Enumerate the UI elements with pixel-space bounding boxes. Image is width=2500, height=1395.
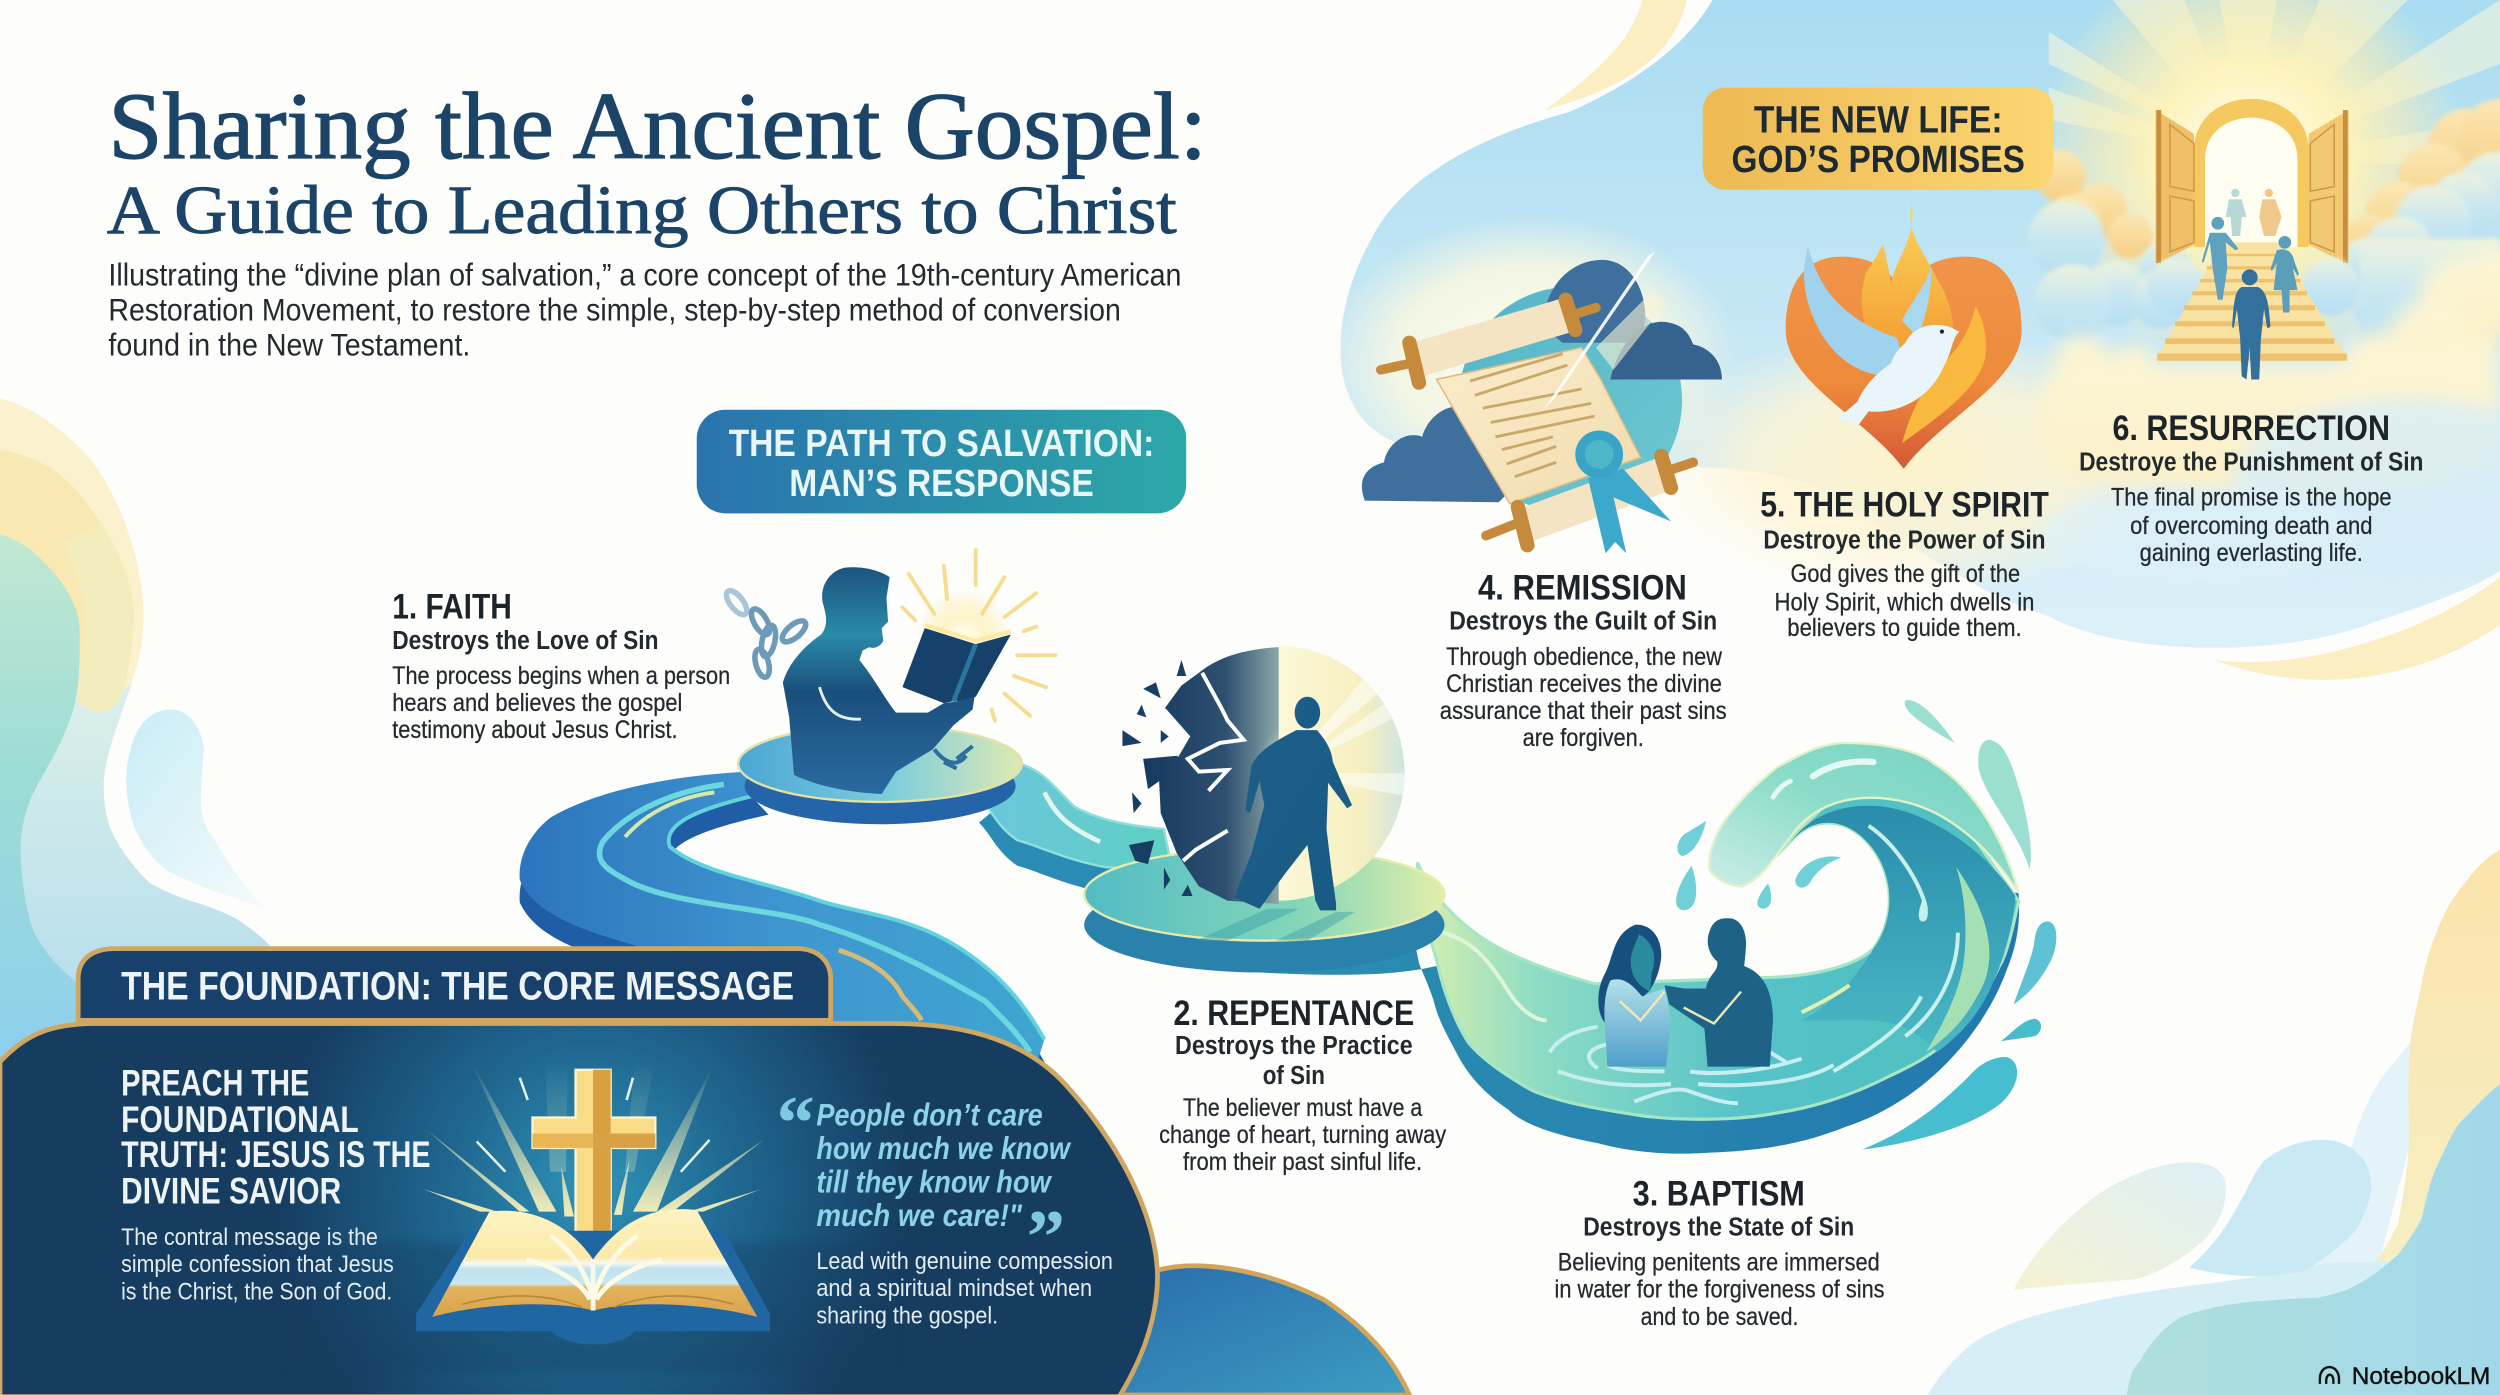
- foundation heading text: DIVINE SAVIOR: [121, 1171, 341, 1212]
- step 6 text: resurrection: of overcoming death and: [2130, 513, 2372, 540]
- cream clouds and ground: [2037, 246, 2500, 497]
- woman hair: [1598, 925, 1661, 1028]
- light beam: [1543, 252, 1655, 410]
- golden clouds: [2034, 99, 2500, 258]
- illustration: faith, person reading a glowing book: [723, 550, 1055, 794]
- step 6 text: resurrection: The final promise is the hope: [2111, 484, 2392, 511]
- title: [107, 73, 1207, 248]
- step 5 text: holy spirit: 5. THE HOLY SPIRIT: [1760, 486, 2049, 525]
- woman torso: [1604, 979, 1671, 1067]
- step 4 text: remission: Through obedience, the new: [1446, 644, 1722, 671]
- parchment: [1437, 348, 1641, 504]
- heading pill: the new life: [1703, 88, 2054, 190]
- icon: golden cross: [533, 1070, 655, 1267]
- pale green stripe: [1926, 867, 1989, 1052]
- step 1 text: faith: Destroys the Love of Sin: [392, 625, 658, 655]
- dark inner curl: [1789, 806, 2015, 1052]
- step 4 text: remission: assurance that their past sins: [1440, 698, 1727, 725]
- dark outer band: [1260, 893, 2019, 1154]
- step 1 text: faith: The process begins when a person: [392, 663, 730, 690]
- background blobs: left: [0, 399, 271, 1065]
- step 6 text: resurrection: [2079, 409, 2423, 567]
- broken chain: [723, 587, 809, 679]
- book light rays: [902, 550, 1055, 721]
- wave crest: [1709, 743, 2018, 893]
- step 5 text: holy spirit: believers to guide them.: [1787, 615, 2022, 642]
- step 3 text: baptism: [1555, 1174, 1885, 1331]
- foundation heading text: [121, 1062, 430, 1212]
- dove: [1804, 246, 1960, 424]
- right door: [2307, 110, 2349, 265]
- foundation heading text: PREACH THE: [121, 1062, 309, 1103]
- step 2 text: repentance: [1159, 994, 1447, 1176]
- blue clouds: [2028, 151, 2500, 351]
- step 4 text: remission: Christian receives the divine: [1446, 671, 1722, 698]
- step 2 text: repentance: change of heart, turning away: [1159, 1122, 1447, 1149]
- heading pill: the new life: GOD’S PROMISES: [1732, 138, 2025, 181]
- step 3 text: baptism: Believing penitents are immersed: [1558, 1250, 1880, 1277]
- illustration: gate, stairs and clouds: [2028, 0, 2500, 582]
- quote: People don’t care: [816, 1097, 1043, 1133]
- icon: open book: [416, 1209, 770, 1344]
- lit half of sphere: [1277, 646, 1405, 901]
- step 2 text: repentance: The believer must have a: [1183, 1095, 1422, 1122]
- quote: much we care!": [816, 1197, 1023, 1233]
- watermark: NotebookLM: NotebookLM: [2352, 1363, 2490, 1390]
- step 4 text: remission: are forgiven.: [1523, 725, 1644, 752]
- top roller: [1409, 314, 1570, 362]
- step 5 text: holy spirit: [1760, 486, 2049, 642]
- step 6 text: resurrection: 6. RESURRECTION: [2113, 409, 2390, 448]
- arch glow interior: [2205, 118, 2298, 247]
- step 5 text: holy spirit: Destroye the Power of Sin: [1763, 524, 2046, 554]
- step 3 text: baptism: in water for the forgiveness of sins: [1555, 1277, 1885, 1304]
- quote body text: sharing the gospel.: [816, 1302, 998, 1329]
- step 1 text: faith: hears and believes the gospel: [392, 690, 682, 717]
- reader silhouette: [783, 567, 976, 794]
- step 6 text: resurrection: Destroye the Punishment of Sin: [2079, 446, 2423, 476]
- foundation body text: simple confession that Jesus: [121, 1251, 394, 1278]
- step 2 text: repentance: 2. REPENTANCE: [1173, 994, 1414, 1033]
- heading pill: the path to salvation: MAN’S RESPONSE: [789, 462, 1094, 505]
- step 2 text: repentance: from their past sinful life.: [1183, 1149, 1422, 1176]
- heading pill: the path to salvation: THE PATH TO SALVATION:: [729, 422, 1154, 465]
- step 6 text: resurrection: gaining everlasting life.: [2140, 540, 2363, 567]
- quote: [776, 1080, 1072, 1280]
- parchment lines: [1470, 354, 1594, 477]
- flames: [1862, 202, 1953, 359]
- winding path: blue and teal rivers: [520, 764, 1172, 1138]
- background blobs: bottom right: [1928, 850, 2500, 1395]
- storm clouds: [1362, 260, 1722, 502]
- step 3 text: baptism: and to be saved.: [1641, 1304, 1798, 1331]
- platform: faith disc: [738, 725, 1022, 824]
- intro text: [108, 256, 1181, 363]
- quote body text: Lead with genuine compession: [816, 1248, 1113, 1275]
- ripples: [1550, 1027, 1834, 1103]
- step 5 text: holy spirit: Holy Spirit, which dwells in: [1775, 590, 2034, 617]
- chain link on disc: [934, 746, 973, 768]
- step 4 text: remission: [1440, 568, 1727, 752]
- heading pill: the path to salvation: [697, 410, 1186, 513]
- step 4 text: remission: Destroys the Guilt of Sin: [1449, 606, 1717, 636]
- panel: the foundation: [0, 949, 1158, 1395]
- light wave highlights: [1443, 826, 1958, 1071]
- step 3 text: baptism: Destroys the State of Sin: [1583, 1212, 1854, 1242]
- shattered dark half: [1143, 647, 1279, 904]
- walking man: [1234, 697, 1352, 910]
- illustration: remission scroll: [1362, 252, 1722, 553]
- golden stairs: [2156, 242, 2349, 360]
- side clouds in front of the doors: [2148, 258, 2360, 316]
- step 1 text: faith: testimony about Jesus Christ.: [392, 717, 678, 744]
- quote: till they know how: [816, 1164, 1053, 1200]
- bottom corner shape: [1116, 1266, 1409, 1395]
- step 1 text: faith: 1. FAITH: [392, 588, 512, 627]
- step 3 text: baptism: 3. BAPTISM: [1633, 1174, 1805, 1213]
- foundation heading text: FOUNDATIONAL: [121, 1099, 359, 1140]
- shards: [1122, 660, 1193, 896]
- wax seal and ribbon: [1588, 469, 1671, 553]
- step 2 text: repentance: Destroys the Practice: [1175, 1030, 1413, 1060]
- panel background: [0, 1024, 1158, 1395]
- water droplets: [1676, 700, 2056, 1149]
- bottom roller: [1523, 474, 1666, 526]
- illustration: baptism people: [1598, 918, 1773, 1067]
- quote: ”: [1027, 1195, 1065, 1280]
- intro text: found in the New Testament.: [108, 327, 470, 363]
- climbing people: [2202, 189, 2299, 379]
- heading pill: the new life: THE NEW LIFE:: [1754, 98, 2003, 141]
- gold arc beside the tab: [839, 950, 922, 1020]
- quote body text: [816, 1248, 1113, 1329]
- title: A Guide to Leading Others to Christ: [107, 172, 1177, 248]
- sparkles: [477, 1078, 710, 1172]
- step 1 text: faith: [392, 588, 730, 744]
- illustration: holy spirit heart and dove: [1786, 202, 2022, 469]
- step 4 text: remission: 4. REMISSION: [1478, 568, 1687, 607]
- man: [1665, 918, 1773, 1067]
- quote: how much we know: [816, 1130, 1072, 1166]
- cracks: [1164, 673, 1244, 861]
- arch: [2194, 99, 2309, 247]
- water surface: [1417, 797, 2018, 1119]
- foundation body text: The contral message is the: [121, 1224, 378, 1251]
- tab heading: the core message: [78, 949, 831, 1020]
- sun rays: [2049, 0, 2500, 167]
- woman face: [1631, 934, 1654, 992]
- intro text: Illustrating the “divine plan of salvation,” a core concept of the 19th-century American: [108, 256, 1181, 292]
- baptism wave and river: [1260, 700, 2056, 1154]
- step 2 text: repentance: of Sin: [1263, 1060, 1325, 1090]
- glow rays behind cross: [424, 1060, 764, 1216]
- lower darker band of panel: [287, 1244, 893, 1371]
- foundation heading text: TRUTH: JESUS IS THE: [121, 1134, 430, 1175]
- background blobs: top right sky: [1323, 0, 2500, 680]
- title: Sharing the Ancient Gospel:: [108, 73, 1207, 179]
- open book: [902, 628, 1011, 703]
- intro text: Restoration Movement, to restore the simple, step-by-step method of conversion: [108, 291, 1121, 327]
- step 5 text: holy spirit: God gives the gift of the: [1790, 561, 2020, 588]
- quote body text: and a spiritual mindset when: [816, 1275, 1092, 1302]
- left door: [2156, 110, 2195, 265]
- tab heading: the core message: THE FOUNDATION: THE CORE MESSAGE: [121, 965, 794, 1009]
- quote: “: [776, 1080, 815, 1165]
- foundation body text: is the Christ, the Son of God.: [121, 1278, 392, 1305]
- foundation body text: [121, 1224, 394, 1305]
- step 2 illustration: broken sphere and walking man: [1084, 638, 1445, 973]
